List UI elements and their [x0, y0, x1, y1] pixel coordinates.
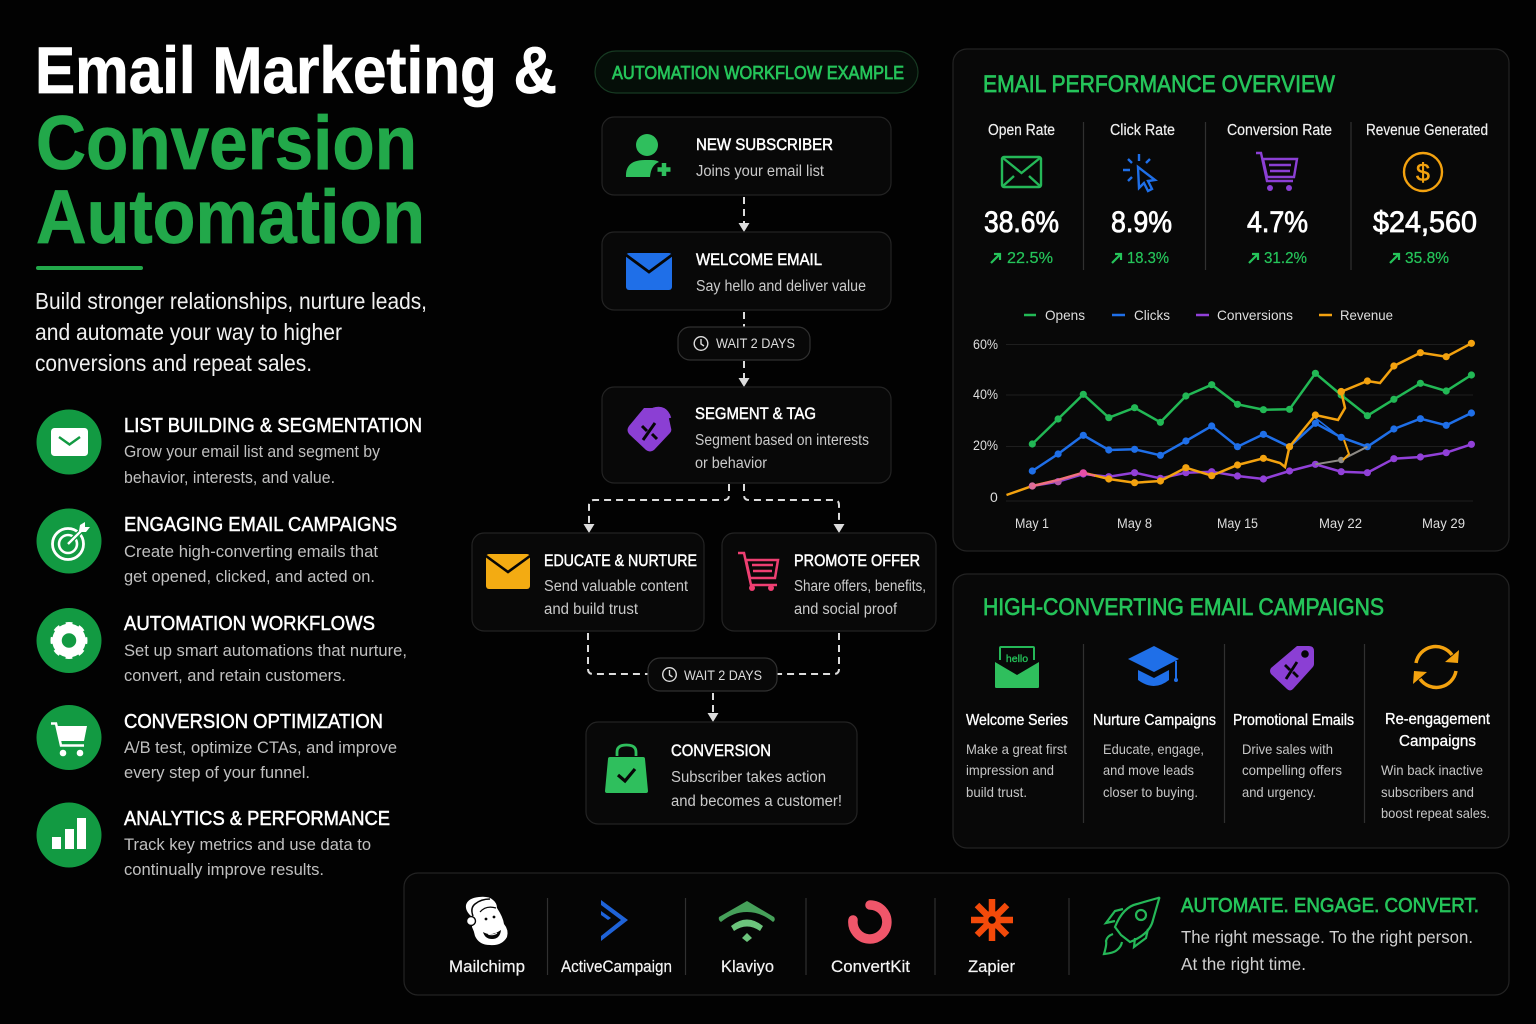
series: clicks	[1032, 413, 1471, 471]
icon: hello envelope	[995, 647, 1039, 688]
line chart: 60%	[973, 336, 998, 352]
feature: analytics: continually improve results.	[124, 860, 324, 879]
campaign: re-engagement: Re-engagement	[1385, 711, 1491, 728]
series: revenue	[1006, 340, 1475, 495]
icon: signal	[719, 901, 775, 942]
icon: hello envelope: hello	[1006, 653, 1028, 665]
icon: mailchimp monkey	[466, 897, 508, 945]
step: conversion: CONVERSION	[671, 741, 771, 760]
line chart: May 22	[1319, 515, 1362, 531]
panel: tools and tagline	[404, 873, 1509, 995]
icon: person plus	[626, 134, 670, 177]
step: promote offer: and social proof	[794, 601, 898, 618]
campaign: promotional emails: compelling offers	[1242, 762, 1342, 778]
step: promote offer	[722, 533, 936, 631]
line chart: 40%	[973, 386, 998, 402]
step: segment and tag: or behavior	[695, 455, 767, 472]
campaign: welcome series: impression and	[966, 762, 1054, 778]
line chart: 0	[990, 489, 998, 505]
tool: klaviyo	[719, 901, 775, 976]
campaign: nurture campaigns: Educate, engage,	[1103, 741, 1204, 757]
feature: engaging campaigns	[36, 508, 397, 586]
metric: revenue: 35.8%	[1405, 250, 1449, 267]
chart legend	[1024, 307, 1393, 323]
wait pill	[678, 327, 810, 360]
chart legend: Opens	[1045, 307, 1085, 323]
feature: conversion optimization: A/B test, optimize CTAs, and improve	[124, 738, 397, 757]
intro text: conversions and repeat sales.	[35, 350, 312, 376]
feature: engaging campaigns: get opened, clicked, and acted on.	[124, 567, 375, 586]
metric: click rate: Click Rate	[1110, 122, 1175, 139]
panel: high-converting email campaigns	[953, 574, 1509, 848]
campaign: promotional emails: and urgency.	[1242, 784, 1316, 800]
campaign: promotional emails	[1233, 646, 1354, 800]
tool: mailchimp	[449, 897, 525, 976]
chart legend: Clicks	[1134, 307, 1170, 323]
metric: open rate: 38.6%	[984, 206, 1059, 239]
feature: engaging campaigns: ENGAGING EMAIL CAMPAIGNS	[124, 514, 397, 536]
tool: activecampaign: ActiveCampaign	[561, 958, 672, 976]
chart legend: Conversions	[1217, 307, 1293, 323]
campaign: re-engagement: subscribers and	[1381, 784, 1474, 800]
workflow heading pill	[595, 51, 918, 93]
campaign: welcome series: Welcome Series	[966, 712, 1068, 729]
feature: automation workflows	[36, 608, 407, 685]
icon: purple tag	[628, 408, 671, 452]
metric: click rate	[1110, 122, 1175, 267]
chart legend: Revenue	[1340, 307, 1393, 323]
icon: purple cart	[1256, 153, 1297, 191]
wait pill	[648, 658, 777, 691]
tool: convertkit	[831, 905, 910, 976]
line chart: May 15	[1217, 515, 1258, 531]
feature: conversion optimization: CONVERSION OPTIMIZATION	[124, 711, 383, 733]
metric: click rate: 18.3%	[1127, 250, 1169, 267]
metric: click rate: 8.9%	[1111, 206, 1172, 239]
icon: graduation cap	[1128, 646, 1179, 686]
metric: conversion rate: Conversion Rate	[1227, 122, 1332, 139]
feature: analytics	[36, 802, 390, 879]
heading: EMAIL PERFORMANCE OVERVIEW	[983, 71, 1335, 98]
step: promote offer: PROMOTE OFFER	[794, 551, 920, 570]
tool: mailchimp: Mailchimp	[449, 958, 525, 976]
icon: blue envelope	[626, 253, 672, 290]
line chart: May 8	[1117, 515, 1152, 531]
wait pill: WAIT 2 DAYS	[716, 335, 795, 351]
campaign: nurture campaigns	[1093, 646, 1216, 800]
icon: dollar coin: $	[1416, 159, 1430, 187]
line chart: 20%	[973, 437, 998, 453]
tagline	[1181, 894, 1479, 974]
campaign: re-engagement: boost repeat sales.	[1381, 805, 1490, 821]
intro text	[35, 288, 427, 376]
campaign: promotional emails: Promotional Emails	[1233, 712, 1354, 729]
intro text: and automate your way to higher	[35, 319, 342, 345]
step: educate and nurture: EDUCATE & NURTURE	[544, 551, 697, 570]
icon: ring	[853, 905, 887, 939]
line chart: May 29	[1422, 515, 1465, 531]
step: welcome email	[602, 232, 891, 310]
metric: conversion rate: 4.7%	[1247, 206, 1308, 239]
feature: automation workflows: convert, and retain customers.	[124, 666, 346, 685]
feature: list building: LIST BUILDING & SEGMENTATION	[124, 415, 422, 437]
feature list	[36, 410, 422, 879]
campaign: re-engagement: Win back inactive	[1381, 762, 1483, 778]
step: welcome email: WELCOME EMAIL	[696, 250, 822, 269]
tool: zapier	[968, 899, 1015, 976]
line chart	[973, 336, 1475, 531]
feature: automation workflows: Set up smart automations that nurture,	[124, 641, 407, 660]
line chart: May 1	[1015, 515, 1049, 531]
wait pill: WAIT 2 DAYS	[684, 667, 762, 683]
step: conversion: Subscriber takes action	[671, 769, 826, 786]
tagline: The right message. To the right person.	[1181, 927, 1473, 947]
workflow connectors	[584, 197, 844, 722]
title: Automation	[36, 175, 425, 260]
feature: analytics: Track key metrics and use data to	[124, 835, 371, 854]
tool: klaviyo: Klaviyo	[721, 958, 774, 976]
series: opens	[1032, 373, 1471, 444]
icon: orange star	[971, 899, 1013, 941]
icon: yellow envelope	[486, 554, 530, 589]
step: new subscriber: Joins your email list	[696, 163, 825, 180]
icon: sync arrows	[1413, 647, 1459, 687]
campaign: welcome series: build trust.	[966, 784, 1027, 800]
metric: revenue: Revenue Generated	[1366, 122, 1488, 139]
feature: analytics: ANALYTICS & PERFORMANCE	[124, 808, 390, 830]
metric: revenue: $24,560	[1373, 206, 1477, 239]
title	[35, 33, 557, 260]
campaign: promotional emails: Drive sales with	[1242, 741, 1333, 757]
step: educate and nurture: Send valuable content	[544, 578, 689, 595]
icon: envelope outline	[1002, 157, 1041, 187]
workflow heading pill: AUTOMATION WORKFLOW EXAMPLE	[612, 63, 904, 83]
step: promote offer: Share offers, benefits,	[794, 578, 926, 595]
feature: list building: Grow your email list and segment by	[124, 442, 380, 461]
campaign: nurture campaigns: Nurture Campaigns	[1093, 712, 1216, 729]
intro text: Build stronger relationships, nurture leads,	[35, 288, 427, 314]
step: conversion: and becomes a customer!	[671, 793, 842, 810]
step: educate and nurture: and build trust	[544, 601, 639, 618]
heading: HIGH-CONVERTING EMAIL CAMPAIGNS	[983, 594, 1384, 621]
metric: revenue	[1366, 122, 1488, 267]
icon: rocket	[1104, 898, 1159, 954]
icon: shopping bag	[605, 745, 648, 793]
feature: list building: behavior, interests, and value.	[124, 468, 335, 487]
tool: zapier: Zapier	[968, 958, 1015, 976]
campaign: welcome series	[966, 647, 1068, 800]
feature: list building	[36, 410, 422, 487]
title: Conversion	[36, 101, 417, 186]
metric: open rate: Open Rate	[988, 122, 1055, 139]
feature: conversion optimization	[36, 705, 397, 782]
tagline: At the right time.	[1181, 954, 1306, 974]
tool: convertkit: ConvertKit	[831, 958, 910, 976]
icon: cursor click	[1123, 154, 1155, 191]
step: segment and tag	[602, 387, 891, 483]
step: segment and tag: SEGMENT & TAG	[695, 404, 816, 423]
step: new subscriber	[602, 117, 891, 195]
series: conversions	[1032, 444, 1471, 486]
step: segment and tag: Segment based on interests	[695, 432, 869, 449]
feature: engaging campaigns: Create high-converting emails that	[124, 542, 378, 561]
metric: conversion rate: 31.2%	[1264, 250, 1307, 267]
step: educate and nurture	[472, 533, 704, 631]
tagline: AUTOMATE. ENGAGE. CONVERT.	[1181, 894, 1479, 917]
campaign: re-engagement: Campaigns	[1399, 733, 1476, 750]
campaign: welcome series: Make a great first	[966, 741, 1067, 757]
campaign: re-engagement	[1381, 647, 1491, 821]
icon: pink cart	[738, 553, 778, 591]
feature: conversion optimization: every step of your funnel.	[124, 763, 310, 782]
campaign: nurture campaigns: closer to buying.	[1103, 784, 1198, 800]
metric: conversion rate	[1227, 122, 1332, 267]
icon: dollar coin	[1404, 153, 1442, 191]
metric: open rate: 22.5%	[1007, 250, 1053, 267]
step: conversion	[586, 722, 857, 824]
campaign: nurture campaigns: and move leads	[1103, 762, 1194, 778]
icon: purple price tag	[1270, 646, 1314, 690]
metric: open rate	[984, 122, 1059, 267]
panel: email performance overview	[953, 49, 1509, 551]
step: new subscriber: NEW SUBSCRIBER	[696, 135, 833, 154]
step: welcome email: Say hello and deliver value	[696, 278, 866, 295]
title: Email Marketing &	[35, 33, 557, 107]
tool: activecampaign	[561, 900, 672, 976]
icon: chevron	[601, 900, 628, 941]
feature: automation workflows: AUTOMATION WORKFLOWS	[124, 613, 375, 635]
